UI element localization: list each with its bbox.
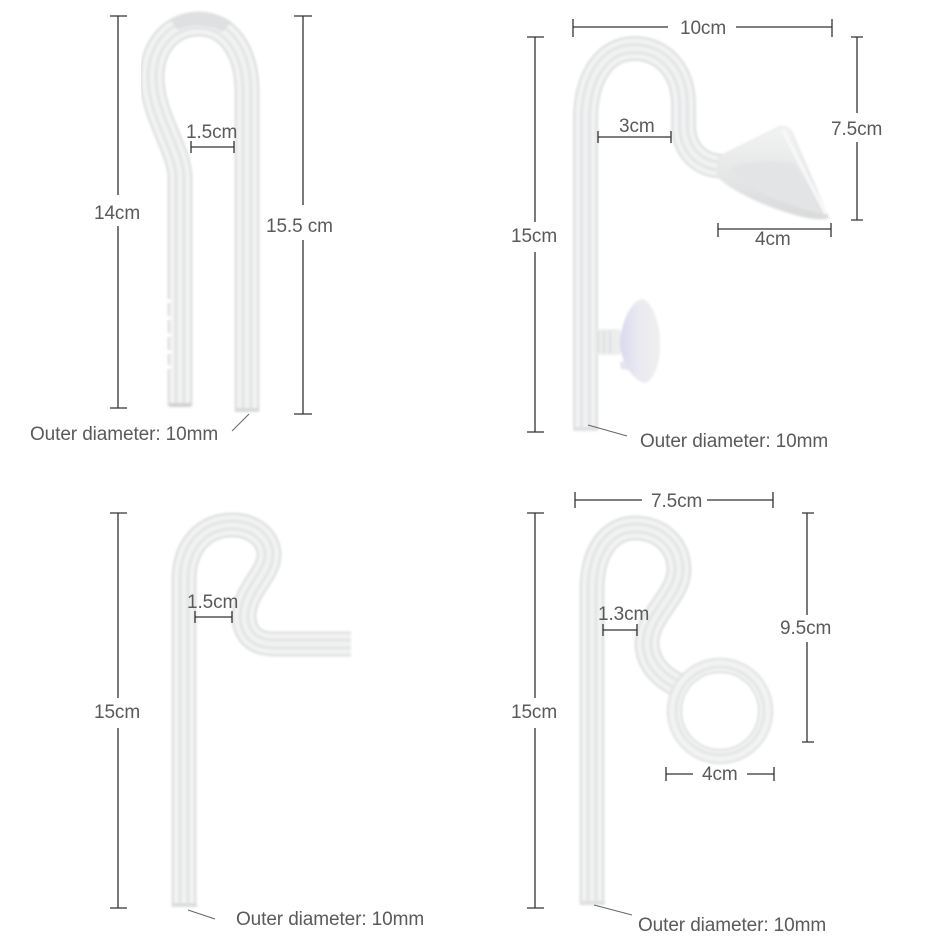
label: outer diameter xyxy=(594,905,826,936)
suction cup xyxy=(594,299,660,383)
panel: bottom-left pipe xyxy=(94,513,424,930)
dimension: 15cm: 15cm xyxy=(511,226,557,247)
dimension: 4cm xyxy=(718,223,831,250)
dimension: 1.3cm xyxy=(598,604,649,636)
glass tube: U-shaped pipe xyxy=(152,13,259,412)
dimension: 10cm xyxy=(573,18,832,39)
dimension: 4cm: 4cm xyxy=(755,229,791,250)
dimension: 15cm xyxy=(511,37,557,432)
label: outer diameter xyxy=(588,425,828,452)
dimension: 3cm: 3cm xyxy=(619,116,655,137)
dimension: 15cm xyxy=(94,513,140,908)
dimension: 3cm xyxy=(598,116,671,143)
dimension: 15.5 cm xyxy=(266,16,333,414)
dimension: 10cm: 10cm xyxy=(680,18,726,39)
dimension: 14cm: 14cm xyxy=(94,203,140,224)
dimension: 7.5cm xyxy=(831,37,882,220)
dimension: 4cm xyxy=(666,764,774,785)
dimension: 4cm: 4cm xyxy=(702,764,738,785)
label: outer diameter: Outer diameter: 10mm xyxy=(30,424,218,445)
dimension: 15cm: 15cm xyxy=(511,702,557,723)
dimension: 7.5cm xyxy=(575,491,773,512)
dimension: 15cm xyxy=(511,513,557,908)
panel: top-left pipe xyxy=(30,13,333,445)
glass tube with ring outlet xyxy=(580,528,766,905)
panel: bottom-right pipe xyxy=(511,491,831,936)
glass tube with bent outlet xyxy=(172,525,351,907)
label: outer diameter: Outer diameter: 10mm xyxy=(640,431,828,452)
dimension: 1.5cm xyxy=(187,592,238,623)
dimension: 1.5cm: 1.5cm xyxy=(187,592,238,613)
glass tube with cone outlet xyxy=(573,48,829,431)
dimension: 7.5cm: 7.5cm xyxy=(831,119,882,140)
dimension: 1.5cm xyxy=(186,122,237,153)
label: outer diameter xyxy=(30,414,249,445)
label: outer diameter: Outer diameter: 10mm xyxy=(236,909,424,930)
panel: top-right pipe xyxy=(511,18,882,452)
dimension: 15cm: 15cm xyxy=(94,702,140,723)
dimension: 1.3cm: 1.3cm xyxy=(598,604,649,625)
dimension: 7.5cm: 7.5cm xyxy=(651,491,702,512)
dimension: 9.5cm xyxy=(780,513,831,742)
dimension: 1.5cm: 1.5cm xyxy=(186,122,237,143)
dimension: 14cm xyxy=(94,16,140,408)
label: outer diameter: Outer diameter: 10mm xyxy=(638,915,826,936)
dimension: 9.5cm: 9.5cm xyxy=(780,618,831,639)
dimension: 15.5 cm: 15.5 cm xyxy=(266,216,333,237)
